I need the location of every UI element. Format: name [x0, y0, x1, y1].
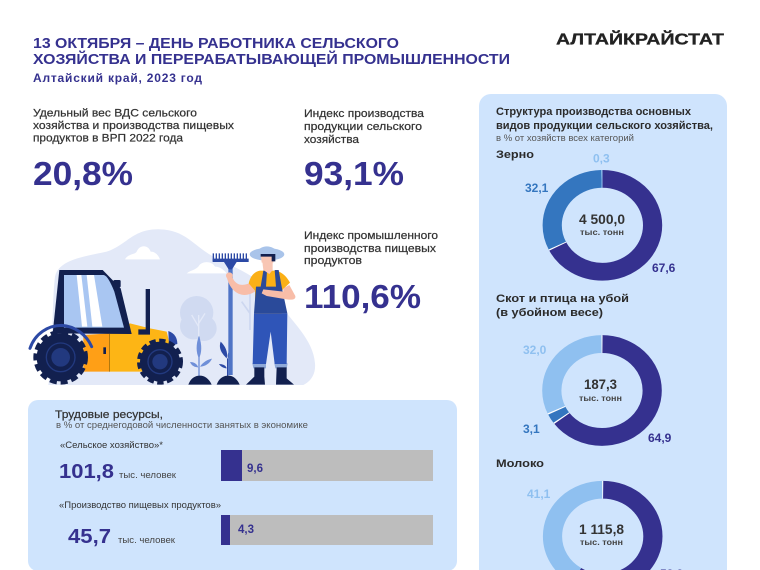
tractor cab [53, 270, 132, 334]
stat: agricultural production index: 93,1% [304, 155, 404, 192]
row: agriculture: тыс. человек [119, 470, 176, 480]
stat: agricultural production index [304, 108, 425, 192]
stat: share of GVA: Удельный вес ВДС сельского [33, 108, 197, 120]
donut: livestock and poultry [496, 293, 672, 445]
donut: grain: тыс. тонн [580, 228, 624, 237]
front wheel [140, 342, 180, 382]
seedlings [188, 336, 240, 385]
labour subheading: в % от среднегодовой численности занятых в экономике [56, 420, 308, 430]
donut: grain: 32,1 [525, 181, 549, 195]
panel heading: видов продукции сельского хозяйства, [496, 120, 713, 132]
row: food production: 45,7 [68, 526, 111, 548]
row: agriculture: 101,8 [59, 461, 114, 483]
panel heading: в % от хозяйств всех категорий [496, 133, 634, 143]
tractor body [83, 333, 109, 372]
panel: production structure [479, 94, 727, 570]
title: 13 ОКТЯБРЯ – ДЕНЬ РАБОТНИКА СЕЛЬСКОГО [33, 36, 399, 52]
donut: livestock and poultry: 187,3 [584, 376, 617, 392]
donut: milk: 1 115,8 [579, 521, 624, 537]
stat: share of GVA: продуктов в ВРП 2022 года [33, 132, 184, 144]
illustration: tractor and farmer [30, 229, 315, 385]
panel: labour resources [28, 400, 457, 570]
row: food production [59, 500, 433, 548]
stat: agricultural production index: Индекс производства [304, 108, 425, 120]
fender [30, 325, 92, 348]
row: agriculture: 9,6 [247, 463, 263, 475]
stat: food production index: производства пищевых [304, 243, 437, 255]
row: agriculture [59, 440, 433, 483]
rake [213, 253, 249, 375]
donut: livestock and poultry: 64,9 [648, 431, 672, 445]
stat: share of GVA: хозяйства и производства пищевых [33, 120, 235, 132]
exhaust pipe [138, 289, 150, 335]
background hill [48, 229, 315, 385]
panel heading [496, 106, 713, 143]
stat: share of GVA: 20,8% [33, 155, 133, 192]
stat: food production index: продуктов [304, 255, 362, 267]
donut: livestock and poultry: 3,1 [523, 422, 540, 436]
donut: milk [496, 458, 684, 570]
donut: milk: Молоко [496, 458, 544, 470]
donut: grain: 4 500,0 [579, 211, 625, 227]
farmer [226, 246, 295, 385]
labour heading: Трудовые ресурсы, [55, 409, 163, 421]
row: agriculture: «Сельское хозяйство»* [60, 440, 164, 450]
panel heading: Структура производства основных [496, 106, 692, 118]
donut: grain: 67,6 [652, 261, 676, 275]
donut: livestock and poultry: 32,0 [523, 343, 547, 357]
donut: grain [496, 149, 676, 275]
rear wheel [37, 333, 85, 381]
title: ХОЗЯЙСТВА И ПЕРЕРАБАТЫВАЮЩЕЙ ПРОМЫШЛЕННОСТИ [33, 50, 510, 68]
donut: livestock and poultry: Скот и птица на убой [496, 293, 629, 305]
donut: grain: Зерно [496, 149, 534, 161]
stat: food production index: Индекс промышленного [304, 230, 438, 242]
donut: milk: тыс. тонн [580, 538, 623, 547]
clouds [125, 246, 160, 259]
stat: food production index [304, 230, 438, 315]
title [33, 36, 510, 68]
donut: livestock and poultry: (в убойном весе) [496, 307, 603, 319]
row: food production: 4,3 [238, 524, 254, 536]
row: food production: тыс. человек [118, 535, 175, 545]
logo: Алтайкрайстат: АЛТАЙКРАЙСТАТ [556, 30, 724, 48]
stat: share of GVA [33, 108, 235, 192]
donut: livestock and poultry: тыс. тонн [579, 394, 622, 403]
pale tree [180, 296, 217, 341]
stat: agricultural production index: продукции сельского [304, 121, 422, 133]
subtitle: Алтайский край, 2023 год [33, 71, 202, 85]
donut: milk: 41,1 [527, 487, 551, 501]
donut: grain: 0,3 [593, 152, 610, 166]
row: food production: «Производство пищевых продуктов» [59, 500, 221, 510]
stat: agricultural production index: хозяйства [304, 134, 360, 146]
stat: food production index: 110,6% [304, 278, 421, 315]
